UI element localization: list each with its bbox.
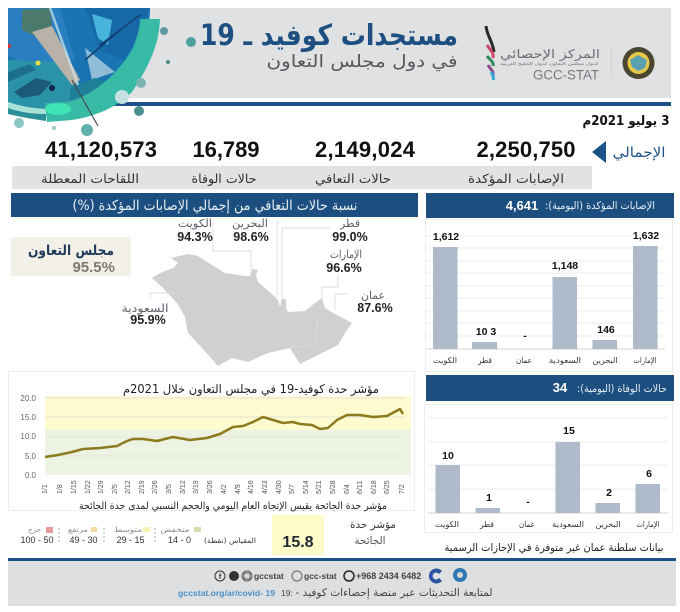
bar chart: confirmed cases: الكويت — [433, 356, 457, 365]
x axis labels: 5/14 — [303, 480, 310, 494]
x axis labels: 1/8 — [57, 484, 64, 494]
label: Bahrain: البحرين — [232, 217, 268, 230]
label: Kuwait — [177, 217, 213, 244]
label: Bahrain: 98.6% — [233, 230, 269, 244]
panel: severity index line chart — [8, 372, 414, 512]
bar chart: deaths: 10 — [442, 450, 454, 462]
panel: daily deaths — [424, 375, 674, 532]
panel: recovery rate map — [11, 193, 418, 366]
bar chart: confirmed cases: - — [523, 330, 527, 342]
bar chart: deaths: قطر — [479, 520, 494, 529]
total label with arrow: الإجمالي — [612, 145, 666, 161]
contact line: +968 2434 6482 — [356, 571, 421, 581]
stat: recoveries: حالات التعافي — [315, 171, 391, 186]
label: Saudi Arabia: 95.9% — [130, 313, 166, 327]
chart title: مؤشر حدة كوفيد-19 في مجلس التعاون خلال 2021م — [123, 382, 379, 397]
icon: GCC emblem — [622, 47, 654, 79]
legend: critical — [20, 526, 54, 545]
bar chart: deaths: السعودية — [552, 520, 584, 529]
legend: medium: 29 - 15 — [116, 535, 145, 545]
Oman data note: بيانات سلطنة عمان غير متوفرة في الإجازات الرسمية — [444, 542, 664, 554]
contact line — [215, 568, 467, 584]
stat: vaccines — [41, 137, 157, 186]
subtitle: في دول مجلس التعاون — [266, 52, 458, 72]
GCC-STAT logo: المركز الإحصائي — [500, 47, 600, 62]
x axis labels: 2/19 — [139, 480, 146, 494]
stat: deaths — [192, 137, 260, 187]
legend: medium — [114, 526, 150, 545]
x axis labels: 6/4 — [344, 484, 351, 494]
chart bands — [45, 396, 411, 475]
label: Saudi Arabia — [122, 302, 168, 327]
y axis labels: 0.0 — [25, 471, 37, 480]
x axis labels: 4/16 — [248, 480, 255, 494]
bar chart: confirmed cases: 146 — [597, 324, 615, 336]
stat: vaccines: اللقاحات المعطلة — [41, 171, 139, 186]
label: Oman — [357, 289, 393, 315]
follow line: gccstat.org/ar/covid- 19 — [178, 588, 275, 598]
x axis labels: 7/2 — [399, 484, 406, 494]
bar chart: deaths: 15 — [563, 425, 575, 437]
totals row — [12, 137, 592, 189]
bar chart: confirmed cases: 1,612 — [433, 231, 459, 243]
icon: partner seal — [453, 568, 467, 582]
severity index value: 15.8 — [282, 534, 314, 551]
bar chart: confirmed cases: 1,632 — [633, 230, 659, 242]
contact line: gccstat — [254, 571, 284, 581]
severity scale legend — [20, 526, 256, 545]
label: Oman: 87.6% — [357, 301, 393, 315]
panel: daily confirmed cases — [426, 193, 674, 372]
x axis labels: 1/1 — [42, 484, 49, 494]
bar chart: confirmed cases: السعودية — [549, 356, 581, 365]
legend: low — [160, 526, 201, 545]
GCC average callout: 95.5% — [72, 259, 115, 276]
footer — [8, 558, 676, 606]
y axis labels — [20, 394, 37, 480]
x axis labels: 2/26 — [152, 480, 159, 494]
x axis labels: 1/15 — [71, 480, 78, 494]
legend: critical: 100 - 50 — [20, 535, 54, 545]
stat: vaccines: 41,120,573 — [45, 137, 157, 162]
GCC average callout: مجلس التعاون — [28, 243, 114, 259]
bar chart: deaths: - — [526, 496, 530, 508]
x axis labels: 2/5 — [112, 484, 119, 494]
x axis labels: 6/25 — [384, 480, 391, 494]
x axis labels: 5/28 — [330, 480, 337, 494]
icon: whatsapp — [344, 571, 354, 581]
panel heading: الإصابات المؤكدة (اليومية): — [545, 200, 655, 212]
label: Bahrain — [232, 217, 269, 244]
legend: critical: حرج — [28, 526, 41, 534]
severity index value: مؤشر حدة — [350, 519, 396, 531]
bar chart: confirmed cases: قطر — [477, 356, 492, 365]
label: UAE: 96.6% — [326, 261, 362, 275]
label: Qatar: قطر — [339, 217, 360, 230]
severity index value — [272, 515, 396, 555]
x axis labels: 4/23 — [262, 480, 269, 494]
bar chart: deaths: 2 — [606, 487, 612, 499]
bar chart: deaths: عمان — [519, 520, 535, 529]
bar chart: confirmed cases: 1,148 — [552, 260, 578, 272]
x axis labels: 3/12 — [180, 480, 187, 494]
y axis labels: 20.0 — [20, 394, 37, 403]
stat: recoveries: 2,149,024 — [315, 137, 416, 162]
x axis labels: 5/7 — [289, 484, 296, 494]
bar chart: deaths: الإمارات — [636, 520, 660, 530]
label: Oman: عمان — [361, 289, 385, 302]
label: Qatar: 99.0% — [332, 230, 368, 244]
icon: facebook — [215, 571, 225, 581]
bar chart: confirmed cases: عمان — [516, 356, 532, 365]
icon: twitter — [229, 571, 239, 581]
follow line: 19: — [281, 588, 293, 598]
follow line: لمتابعة التحديثات عبر منصة إحصاءات كوفيد - — [296, 587, 492, 599]
legend: high — [68, 526, 98, 545]
bar chart: confirmed cases: البحرين — [592, 356, 618, 365]
bar chart: confirmed cases — [433, 230, 659, 366]
legend: high: مرتفع — [68, 526, 88, 534]
title: مستجدات كوفيد ـ 19 — [200, 18, 458, 52]
bar chart: deaths: 6 — [646, 468, 652, 480]
severity index value: الجائحة — [354, 535, 386, 547]
icon: user — [292, 571, 302, 581]
GCC-STAT logo: GCC-STAT — [533, 68, 599, 82]
legend: medium: متوسط — [114, 526, 142, 534]
header banner — [8, 8, 671, 106]
panel heading: 4,641 — [506, 198, 538, 213]
header illustration — [0, 0, 196, 136]
panel heading — [426, 193, 674, 218]
stat: deaths: حالات الوفاة — [192, 171, 256, 187]
x axis labels: 1/22 — [85, 480, 92, 494]
bar chart: confirmed cases: 10 3 — [476, 326, 496, 338]
x axis labels: 4/2 — [221, 484, 228, 494]
GCC-STAT logo — [486, 26, 612, 82]
x axis labels: 3/19 — [193, 480, 200, 494]
bar chart: deaths: 1 — [486, 492, 492, 504]
x axis labels: 5/21 — [316, 480, 323, 494]
bar chart: deaths — [435, 425, 660, 530]
y axis labels: 15.0 — [20, 413, 37, 422]
leader lines — [213, 222, 347, 310]
x axis labels: 3/5 — [166, 484, 173, 494]
x axis labels — [42, 480, 406, 494]
label: UAE: الإمارات — [330, 248, 362, 261]
stat: recoveries — [315, 137, 416, 186]
stat: confirmed: الإصابات المؤكدة — [468, 171, 564, 187]
x axis labels: 2/12 — [125, 480, 132, 494]
x axis labels: 6/11 — [357, 481, 364, 494]
GCC map — [152, 254, 352, 366]
label: Kuwait: 94.3% — [177, 230, 213, 244]
chart caption: مؤشر حدة الجائحة يقيس الإتجاه العام اليومي والحجم النسبي لمدى حدة الجائحة — [79, 501, 387, 512]
x axis labels: 1/29 — [98, 480, 105, 494]
bar chart: confirmed cases: الإمارات — [634, 356, 656, 366]
x axis labels: 6/18 — [371, 480, 378, 494]
label: Qatar — [332, 217, 368, 244]
panel heading — [426, 375, 674, 401]
stat: confirmed: 2,250,750 — [476, 137, 576, 162]
follow line — [178, 587, 492, 599]
panel heading: نسبة حالات التعافي من إجمالي الإصابات المؤكدة (%) — [72, 198, 358, 214]
contact line: gcc-stat — [304, 571, 337, 581]
icon: partner logo — [429, 568, 442, 584]
total label with arrow — [592, 141, 666, 163]
bar chart: deaths: البحرين — [596, 520, 620, 529]
GCC average callout — [11, 237, 131, 276]
icon: facebook: f — [219, 574, 222, 581]
y axis labels: 10.0 — [20, 432, 37, 441]
label: Kuwait: الكويت — [178, 217, 212, 230]
panel heading: 34 — [553, 380, 568, 395]
label: UAE — [326, 248, 362, 275]
date: 3 يوليو 2021م — [582, 114, 670, 129]
y axis labels: 5.0 — [25, 452, 37, 461]
panel heading — [11, 193, 418, 217]
GCC-STAT logo: لدول مجلس التعاون لدول الخليج العربية — [500, 61, 598, 66]
legend: low: منخفض — [160, 526, 190, 534]
x axis labels: 4/9 — [235, 484, 242, 494]
stat: confirmed — [468, 137, 576, 187]
x axis labels: 3/26 — [207, 480, 214, 494]
bar chart: deaths: الكويت — [435, 520, 459, 529]
stat: deaths: 16,789 — [192, 137, 260, 162]
severity scale legend: المقياس (نقطة) — [204, 537, 256, 545]
x axis labels: 4/30 — [276, 480, 283, 494]
legend: low: 14 - 0 — [168, 535, 191, 545]
label: Saudi Arabia: السعودية — [122, 302, 168, 315]
icon: instagram — [242, 571, 252, 581]
legend: high: 49 - 30 — [69, 535, 98, 545]
panel heading: حالات الوفاة (اليومية): — [577, 383, 667, 395]
severity line — [45, 409, 403, 457]
